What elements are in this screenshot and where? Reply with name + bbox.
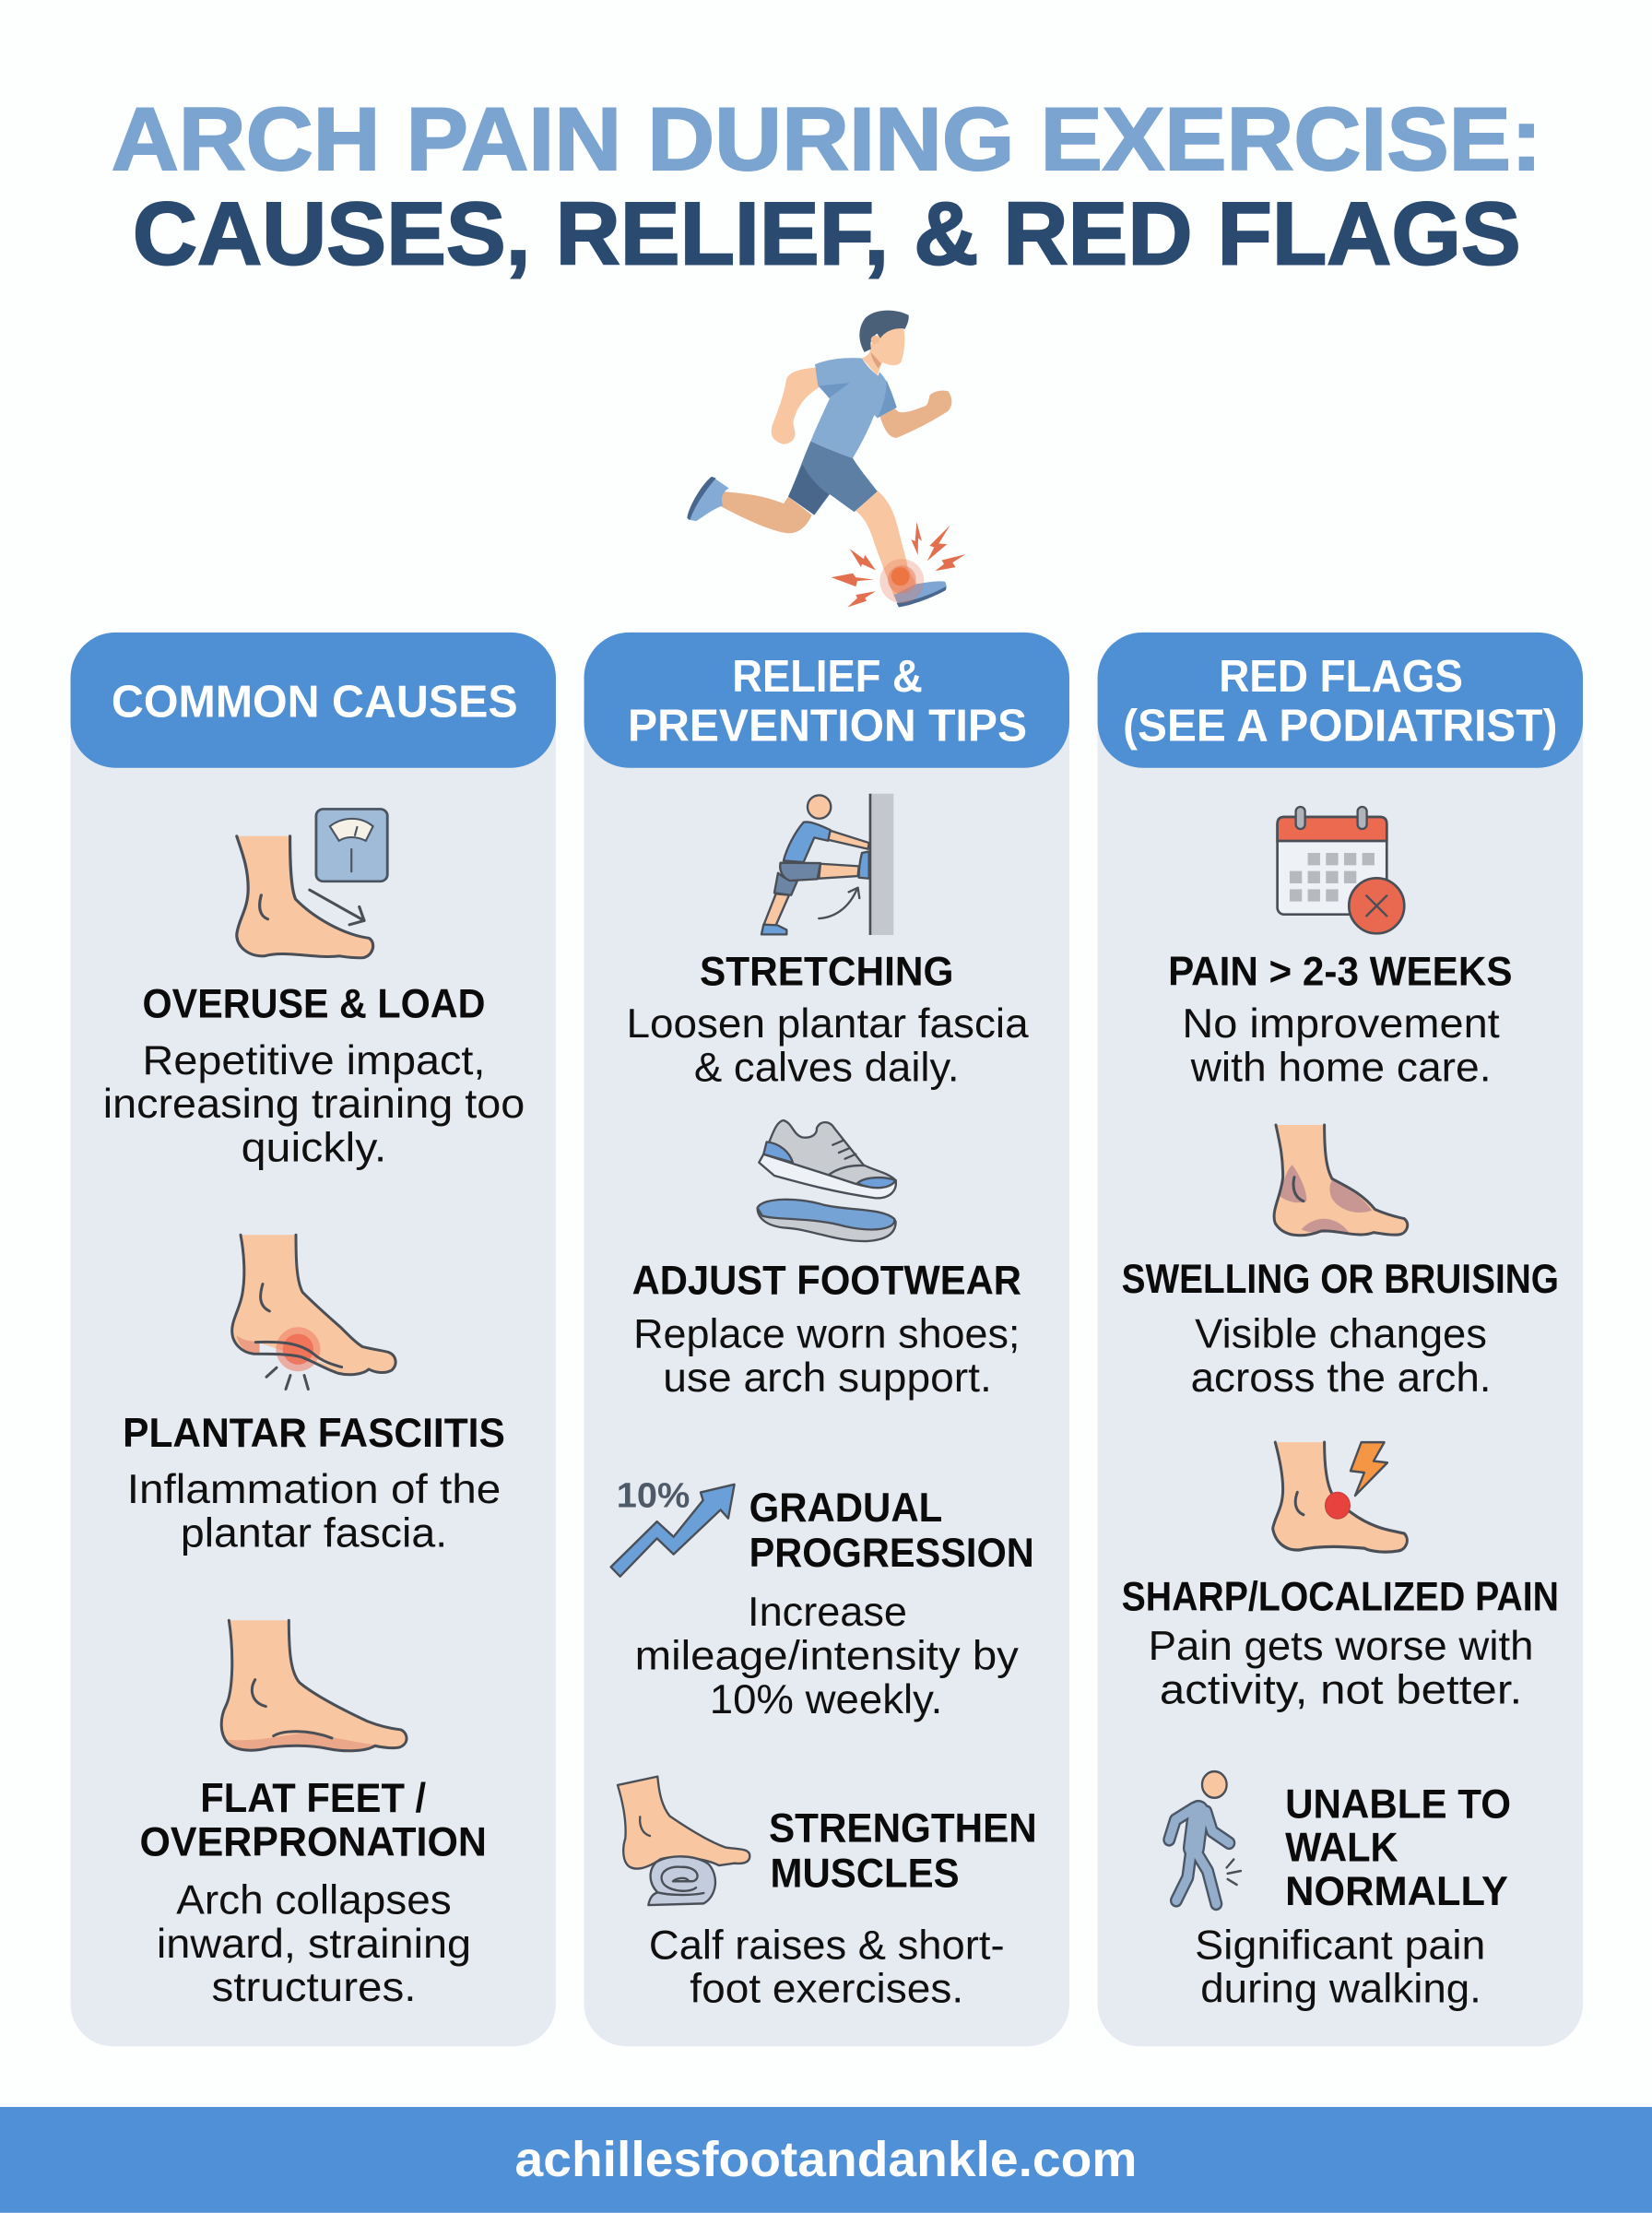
panel background	[584, 663, 1069, 2046]
item: overuse and load	[103, 809, 525, 1171]
heading: OVERPRONATION	[140, 1820, 487, 1865]
icon: shoe and insole	[758, 1120, 896, 1241]
description: inward, straining	[157, 1922, 471, 1967]
icon: foot on rolled towel	[618, 1777, 749, 1905]
heading: NORMALLY	[1285, 1869, 1508, 1914]
description: No improvement	[1182, 1001, 1500, 1047]
icon: bruised foot	[1274, 1125, 1408, 1236]
icon: foot with lightning bolt	[1273, 1442, 1407, 1552]
item: adjust footwear	[632, 1120, 1021, 1401]
heading: PROGRESSION	[749, 1531, 1034, 1576]
footer bar	[0, 2107, 1652, 2213]
description: Calf raises & short-	[649, 1923, 1005, 1968]
icon: foot with inflamed fascia	[232, 1235, 395, 1390]
heading: MUSCLES	[771, 1851, 960, 1896]
item: flat feet	[140, 1620, 487, 2010]
description: increasing training too	[103, 1082, 525, 1127]
panel: common causes	[71, 633, 556, 2046]
description: Replace worn shoes;	[633, 1312, 1020, 1357]
icon: flat foot	[221, 1620, 407, 1751]
column header	[1098, 633, 1583, 768]
column header: RED FLAGS	[1219, 652, 1463, 702]
heading: STRETCHING	[700, 949, 953, 994]
title: CAUSES, RELIEF, & RED FLAGS	[133, 184, 1521, 283]
description: Repetitive impact,	[143, 1038, 485, 1083]
icon: foot with scale	[237, 809, 387, 958]
description	[633, 1312, 1020, 1401]
column header: PREVENTION TIPS	[628, 702, 1027, 751]
column header: (SEE A PODIATRIST)	[1123, 702, 1557, 751]
description: Arch collapses	[176, 1877, 452, 1923]
column header: COMMON CAUSES	[112, 678, 518, 728]
description: & calves daily.	[694, 1045, 960, 1090]
description: Increase	[748, 1590, 907, 1635]
icon: wall calf stretch	[761, 794, 893, 935]
heading: FLAT FEET /	[200, 1776, 426, 1821]
description	[1182, 1001, 1500, 1090]
icon: calendar with cross	[1278, 807, 1404, 933]
description: Pain gets worse with	[1149, 1624, 1533, 1669]
item: strengthen muscles	[618, 1777, 1037, 2012]
column header	[71, 633, 556, 768]
icon: 10% upward arrow: 10%	[617, 1476, 690, 1516]
description	[1191, 1312, 1492, 1401]
panel: red flags	[1098, 633, 1583, 2046]
item: pain over 2-3 weeks	[1168, 807, 1512, 1090]
heading: WALK	[1285, 1826, 1398, 1871]
description	[1149, 1624, 1533, 1712]
heading	[1285, 1781, 1511, 1914]
description: across the arch.	[1191, 1355, 1492, 1401]
panel background	[71, 663, 556, 2046]
description: foot exercises.	[690, 1967, 963, 2012]
heading: PLANTAR FASCIITIS	[123, 1411, 505, 1456]
description: with home care.	[1190, 1045, 1492, 1090]
description: Inflammation of the	[127, 1467, 501, 1512]
item: sharp localized pain	[1122, 1442, 1559, 1712]
item: swelling or bruising	[1122, 1125, 1559, 1401]
heading	[769, 1805, 1037, 1896]
item: gradual progression	[611, 1476, 1034, 1722]
description: quickly.	[242, 1126, 386, 1171]
heading: GRADUAL	[749, 1485, 942, 1531]
description: Significant pain	[1195, 1923, 1485, 1968]
item: unable to walk normally	[1169, 1771, 1511, 2012]
heading: STRENGTHEN	[769, 1805, 1037, 1851]
description	[626, 1001, 1029, 1090]
heading	[749, 1485, 1034, 1576]
panel: relief and prevention tips	[584, 633, 1069, 2046]
description	[635, 1590, 1020, 1722]
description	[157, 1877, 471, 2010]
description	[649, 1923, 1005, 2012]
icon: 10% upward arrow	[611, 1476, 735, 1577]
heading: SHARP/LOCALIZED PAIN	[1122, 1574, 1559, 1619]
heading: ADJUST FOOTWEAR	[632, 1259, 1021, 1304]
heading: SWELLING OR BRUISING	[1122, 1257, 1559, 1302]
heading: OVERUSE & LOAD	[143, 982, 485, 1027]
description: activity, not better.	[1160, 1667, 1522, 1712]
panel background	[1098, 663, 1583, 2046]
icon: limping figure	[1169, 1771, 1241, 1904]
item: stretching	[626, 794, 1029, 1090]
description: use arch support.	[663, 1355, 992, 1401]
description	[1195, 1923, 1485, 2012]
description	[103, 1038, 525, 1171]
illustration: runner with foot pain	[687, 311, 965, 607]
description: during walking.	[1200, 1967, 1481, 2012]
description: plantar fascia.	[181, 1510, 447, 1556]
heading: PAIN > 2-3 WEEKS	[1168, 949, 1512, 994]
description: Visible changes	[1195, 1312, 1487, 1357]
column header	[584, 633, 1069, 768]
column header: RELIEF &	[732, 652, 923, 702]
title	[112, 90, 1542, 283]
description	[127, 1467, 501, 1556]
description: structures.	[212, 1965, 416, 2010]
title: ARCH PAIN DURING EXERCISE:	[112, 90, 1542, 189]
heading	[140, 1776, 487, 1865]
item: plantar fasciitis	[123, 1235, 505, 1556]
description: 10% weekly.	[710, 1677, 942, 1722]
description: mileage/intensity by	[635, 1634, 1020, 1679]
description: Loosen plantar fascia	[626, 1001, 1029, 1047]
footer bar: achillesfootandankle.com	[515, 2133, 1137, 2187]
heading: UNABLE TO	[1285, 1781, 1511, 1827]
